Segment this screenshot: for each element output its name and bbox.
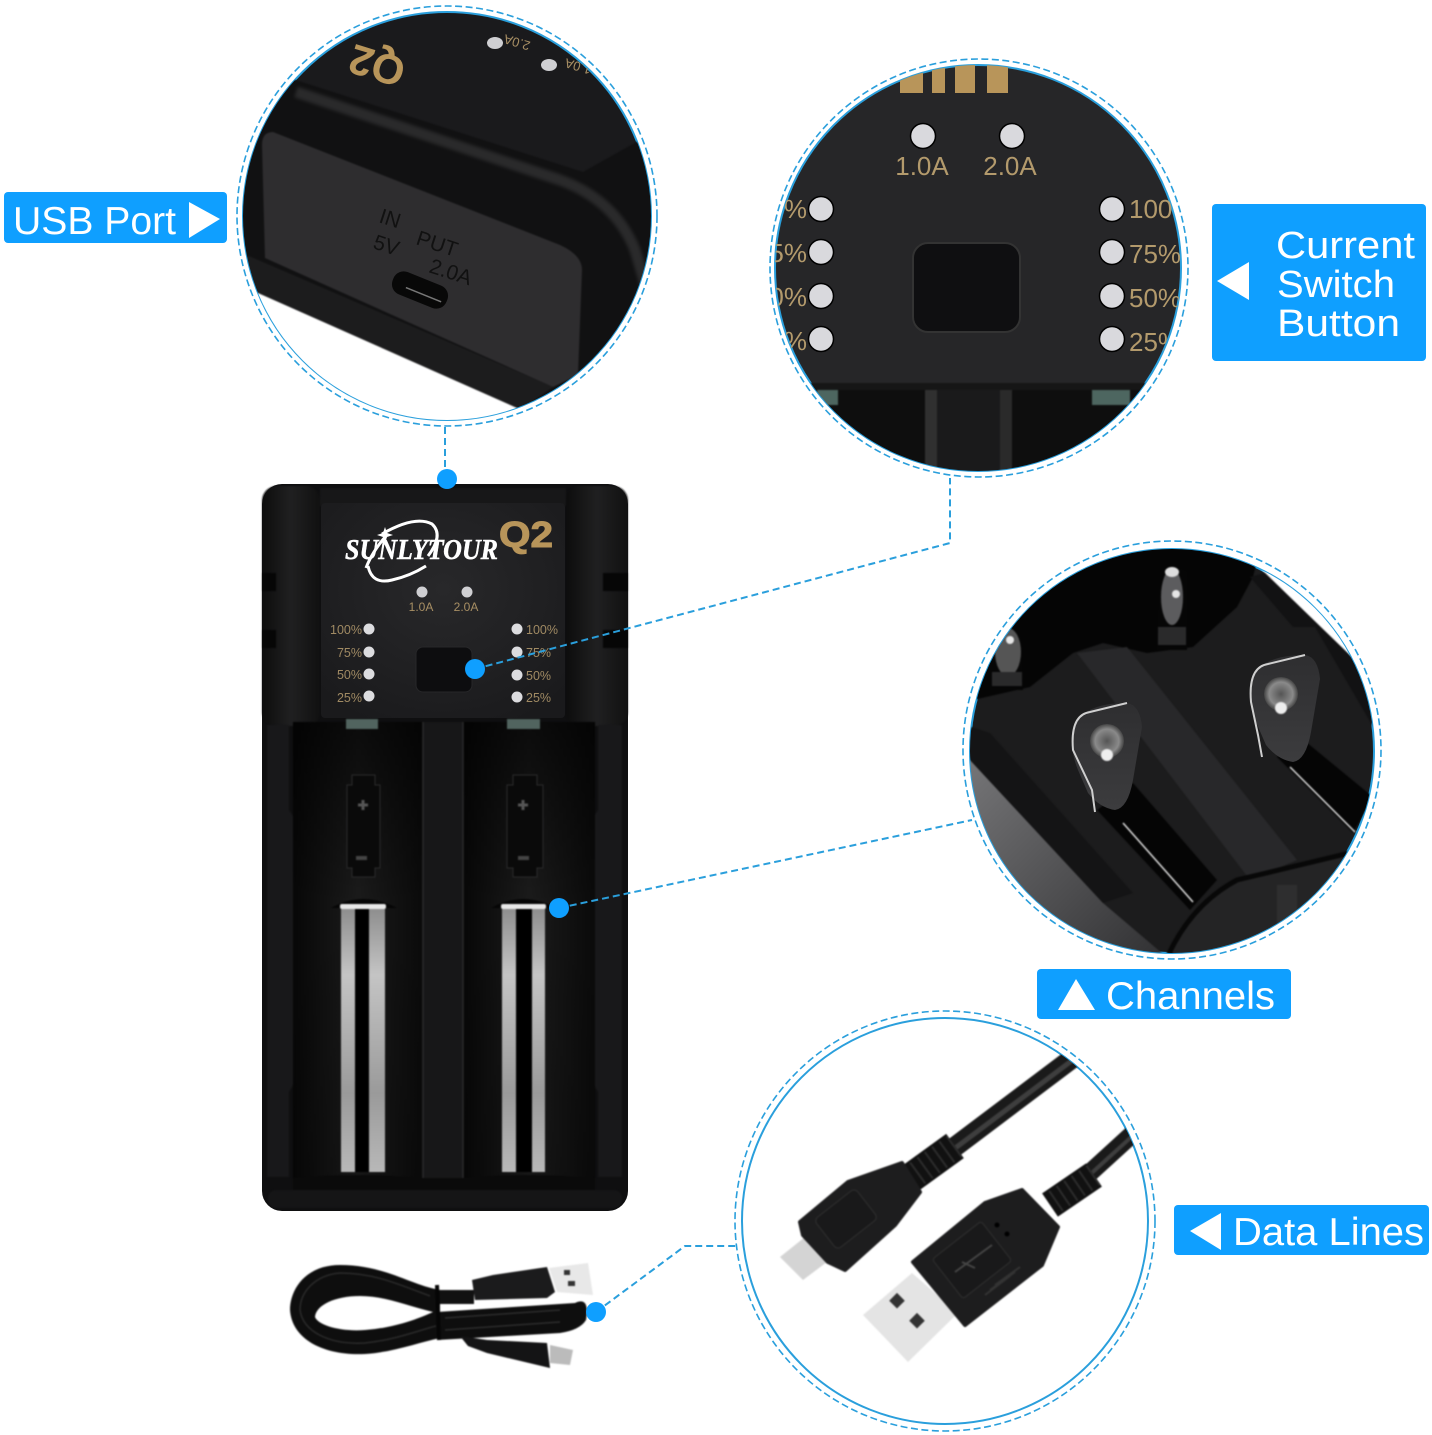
white gap top right — [1261, 570, 1351, 658]
metal strip right — [491, 899, 556, 1172]
marker dots — [437, 469, 606, 1322]
positive and negative slots, right — [507, 775, 543, 877]
charge level indicators right: 25% — [526, 691, 551, 705]
label: Data Lines — [1174, 1205, 1429, 1255]
panel: current switch close-up — [740, 59, 1196, 483]
label: USB Port — [4, 192, 227, 243]
text: rotated current labels — [506, 34, 589, 74]
text: indicator labels: 100% — [740, 194, 807, 224]
contact tabs — [346, 719, 378, 729]
charge level indicators right: 100% — [526, 623, 558, 637]
back wall — [976, 549, 1256, 700]
text: input rating — [374, 209, 469, 286]
left floor and strip — [970, 760, 1170, 960]
current indicators — [409, 586, 478, 614]
USB plug — [440, 1290, 474, 1304]
text: rotated Q2: Q2 — [343, 35, 411, 96]
button — [416, 647, 472, 692]
metal strip left — [331, 899, 397, 1172]
charge level indicators right — [512, 623, 558, 705]
label: Channels: Channels — [1106, 975, 1275, 1018]
LEDs — [808, 124, 1124, 352]
text: rotated current labels: 2.0A — [502, 31, 532, 53]
text: indicator labels — [775, 156, 1180, 352]
label: Current Switch Button: Button — [1277, 303, 1400, 345]
charger body — [262, 484, 628, 1211]
bottom lip — [293, 1175, 595, 1190]
logo: SUNLYTOUR — [345, 534, 498, 566]
charge level indicators left: 75% — [337, 646, 362, 660]
text: indicator labels: 50% — [1129, 283, 1181, 313]
current indicators: 1.0A — [409, 600, 433, 614]
side notches — [262, 573, 628, 648]
label: Current Switch Button: Current — [1276, 225, 1415, 267]
front lip — [1166, 850, 1348, 953]
text: input rating: 2.0A — [426, 255, 475, 290]
rear contacts — [1176, 648, 1187, 650]
center rib — [423, 722, 463, 1178]
USB-A plug — [863, 1175, 1094, 1362]
label: Current Switch Button — [1212, 204, 1426, 361]
logo — [345, 521, 498, 581]
label: Channels — [1037, 969, 1291, 1019]
text: indicator labels: 2.0A — [983, 151, 1037, 181]
cable bundle — [437, 1301, 587, 1340]
cables — [948, 1054, 1078, 1156]
button — [913, 243, 1020, 332]
text: indicator labels: 75% — [1129, 239, 1181, 269]
text: Q2: Q2 — [499, 514, 553, 555]
label: USB Port: USB Port — [13, 200, 176, 243]
label: Current Switch Button: Switch — [1277, 264, 1395, 306]
top faceplate — [321, 503, 565, 718]
charge level indicators left: 50% — [337, 668, 362, 682]
gold logo fragments — [900, 65, 1008, 93]
cable loop — [290, 1265, 440, 1354]
current indicators: 2.0A — [454, 600, 478, 614]
connector lines — [445, 427, 972, 1312]
text: indicator labels: 75% — [755, 238, 807, 268]
contact plate right — [1250, 655, 1320, 762]
text: indicator labels: 25% — [1129, 327, 1181, 357]
central ridge — [1077, 647, 1297, 880]
icon: USB socket — [392, 271, 448, 309]
text: indicator labels: 25% — [755, 326, 807, 356]
text: input rating: IN — [376, 205, 404, 233]
positive and negative slots, left — [347, 775, 380, 877]
charge level indicators left: 25% — [337, 691, 362, 705]
LED dots — [487, 37, 557, 71]
charge level indicators left: 100% — [330, 623, 362, 637]
text: indicator labels: 50% — [755, 282, 807, 312]
battery bay right — [463, 722, 595, 1178]
panel: USB port close-up — [230, 6, 670, 440]
text: indicator labels: 100% — [1129, 194, 1196, 224]
text: rotated current labels: 1.0A — [563, 55, 593, 77]
battery bay left — [293, 722, 423, 1178]
charge level indicators right: 75% — [526, 646, 551, 660]
side rails — [267, 725, 622, 1177]
micro USB plug — [780, 1146, 955, 1280]
micro plug — [460, 1336, 550, 1368]
text: input rating: PUT — [413, 227, 461, 262]
cable thumbnail — [290, 1263, 593, 1368]
charge level indicators right: 50% — [526, 669, 551, 683]
panel: data line close-up — [735, 1011, 1155, 1431]
text: indicator labels: 1.0A — [895, 151, 949, 181]
label: Data Lines: Data Lines — [1233, 1211, 1424, 1254]
contact plate left — [1072, 703, 1142, 812]
text: input rating: 5V — [370, 231, 402, 261]
charge level indicators left — [330, 623, 374, 705]
slots — [1097, 783, 1217, 910]
right ribs — [1250, 573, 1375, 730]
panel: channels close-up — [960, 540, 1390, 965]
lower bay — [810, 382, 1146, 471]
